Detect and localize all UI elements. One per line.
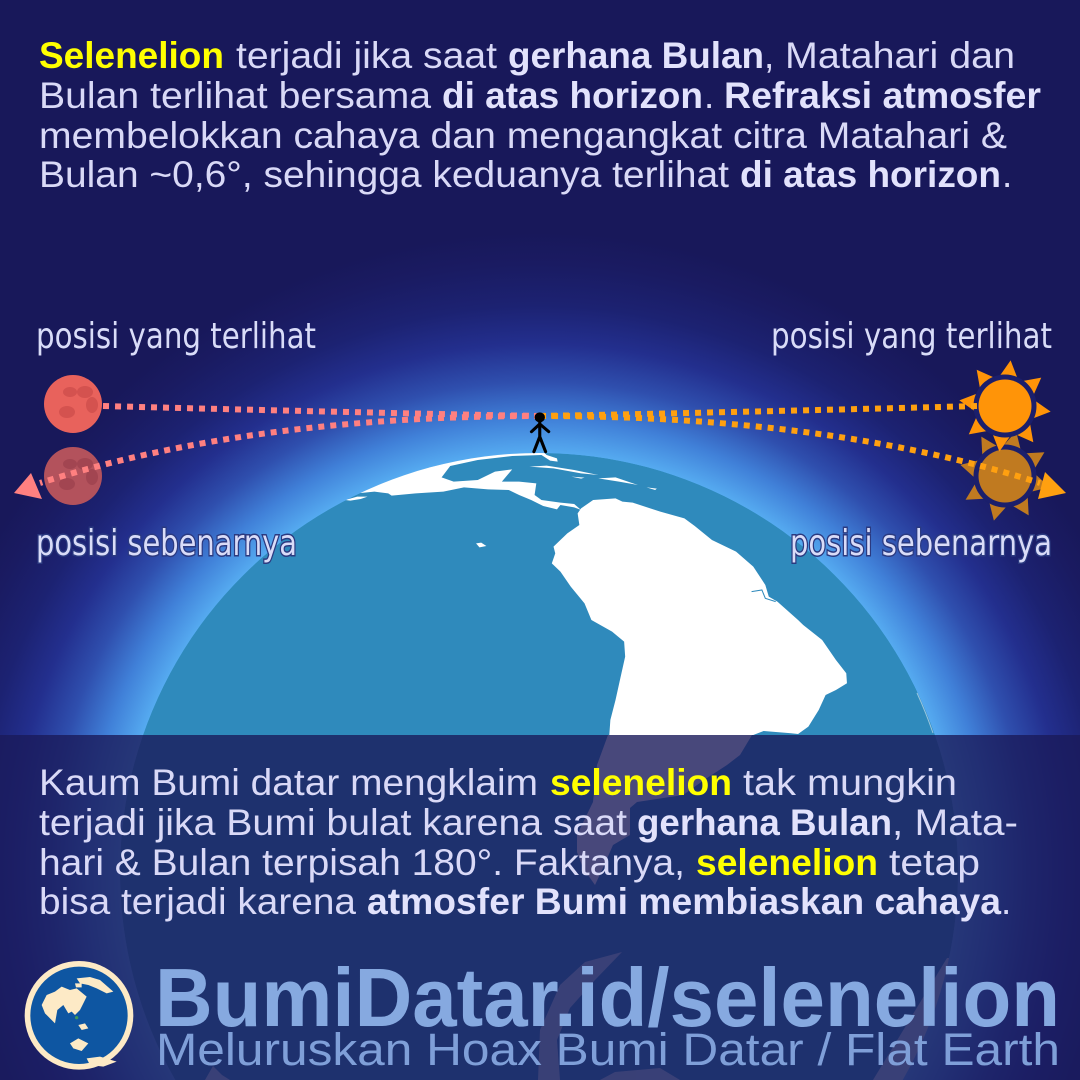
bottom translucent panel: [0, 735, 1080, 1080]
bottom text block: [39, 762, 1018, 922]
label: apparent position left: posisi yang terlihat: [36, 316, 316, 357]
bottom text block: bisa terjadi karena: [39, 881, 356, 922]
bottom text block: tak mungkin: [743, 762, 957, 803]
top text block: Refraksi atmosfer: [724, 75, 1041, 116]
top text block: .: [704, 75, 714, 116]
top text block: membelokkan cahaya dan mengangkat citra Matahari &: [39, 115, 1007, 156]
label: true position left: posisi sebenarnya: [36, 523, 297, 564]
top text block: Selenelion: [39, 35, 224, 76]
icon: true moon position: [44, 447, 102, 505]
icon: true sun position: [958, 429, 1052, 523]
top text block: .: [1002, 154, 1012, 195]
icon: apparent blood moon: [44, 375, 102, 433]
top text block: di atas horizon: [442, 75, 703, 116]
top text block: Bulan terlihat bersama: [39, 75, 431, 116]
top text block: Matahari dan: [785, 35, 1015, 76]
bottom text block: Kaum Bumi datar mengklaim: [39, 762, 538, 803]
footer url: BumiDatar.id/selenelion: [155, 951, 1060, 1044]
bottom text block: .: [1001, 881, 1011, 922]
top text block: Bulan ~0,6°, sehingga keduanya terlihat: [39, 154, 730, 195]
bottom text block: tetap: [889, 842, 980, 883]
bottom text block: atmosfer Bumi membiaskan cahaya: [367, 881, 1001, 922]
top text block: di atas horizon: [740, 154, 1001, 195]
top text block: terjadi jika saat: [236, 35, 498, 76]
icon: apparent sun: [958, 359, 1052, 453]
bottom text block: hari & Bulan terpisah 180°. Faktanya,: [39, 842, 685, 883]
bottom text block: , Mata-: [892, 802, 1018, 843]
dotted ray with arrow: moon true direction: [14, 416, 540, 499]
icon: logo globe: [25, 961, 133, 1070]
bottom text block: gerhana Bulan: [637, 802, 892, 843]
footer tagline: Meluruskan Hoax Bumi Datar / Flat Earth: [156, 1024, 1060, 1075]
bottom text block: selenelion: [696, 842, 878, 883]
earth globe: [120, 448, 960, 1080]
top text block: gerhana Bulan: [508, 35, 764, 76]
dotted ray: moon apparent position: [103, 406, 540, 416]
icon: stick figure observer: [531, 412, 549, 452]
dotted ray with arrow: sun true direction: [540, 416, 1066, 499]
dotted ray: sun apparent position: [540, 406, 977, 416]
top text block: ,: [764, 35, 774, 76]
bottom text block: selenelion: [550, 762, 732, 803]
top text block: [39, 35, 1041, 195]
bottom text block: terjadi jika Bumi bulat karena saat: [39, 802, 628, 843]
